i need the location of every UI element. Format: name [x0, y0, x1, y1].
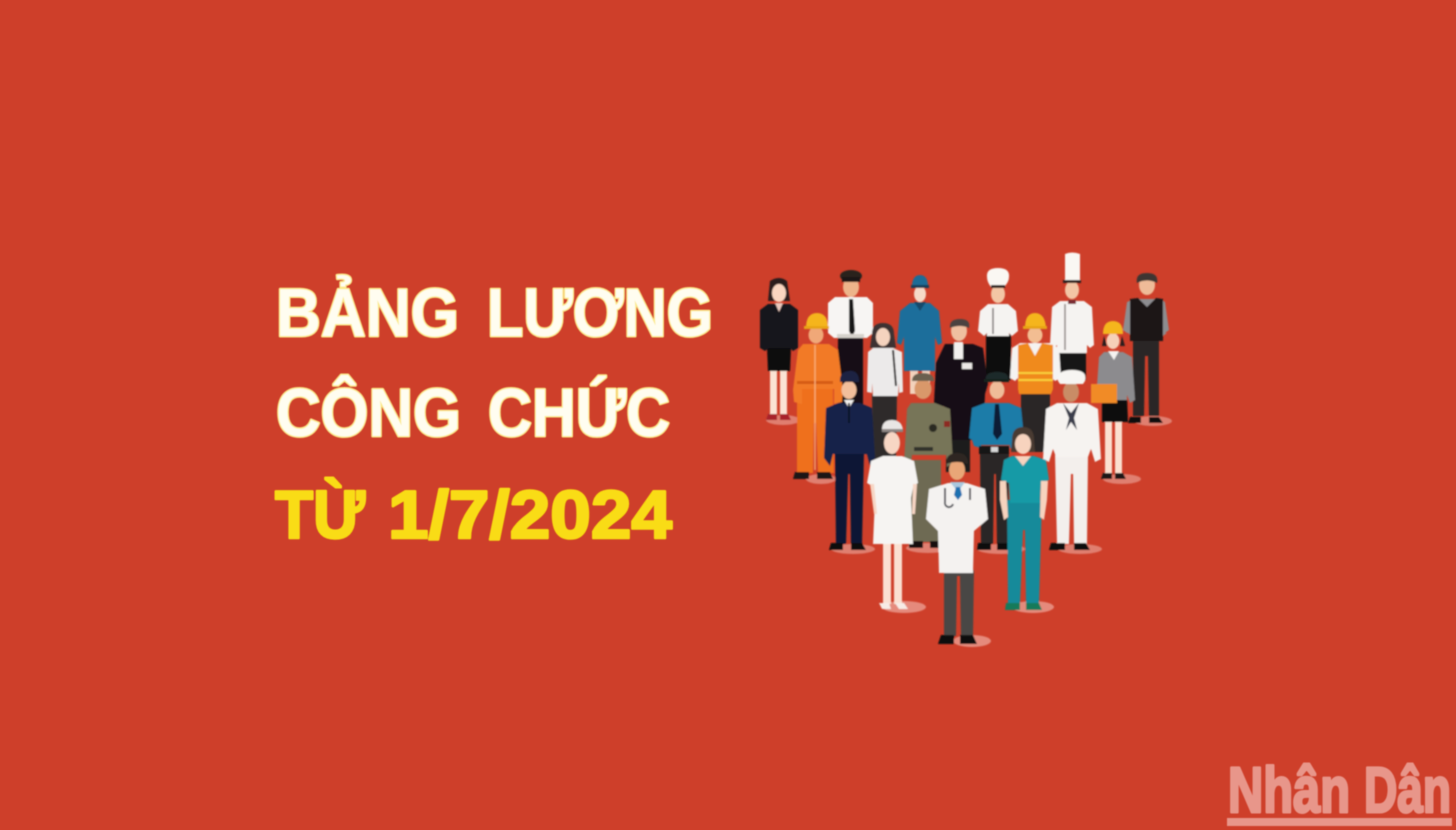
figure: judge in robe	[934, 319, 988, 472]
figure: police officer	[969, 372, 1025, 554]
figure: worker in safety vest	[1010, 313, 1061, 452]
figure: navy officer	[824, 371, 875, 554]
figure: woman in white shirt	[867, 323, 903, 460]
figure: flight attendant	[897, 275, 942, 394]
title line: TỪ 1/7/2024: TỪ	[275, 477, 366, 553]
logo text: Nhân	[1228, 754, 1350, 826]
group of workers illustration	[760, 252, 1172, 647]
figure: nurse in teal scrubs	[1000, 427, 1054, 613]
logo underline	[1227, 818, 1452, 826]
title line: CÔNG CHỨC: CÔNG	[276, 374, 461, 451]
title line: TỪ 1/7/2024: 1/7/2024	[388, 477, 672, 553]
figure: pilot	[828, 270, 873, 406]
figure: woman in black suit	[760, 278, 800, 425]
title line: CÔNG CHỨC: CHỨC	[488, 375, 670, 451]
title	[275, 274, 713, 553]
figure: doctor	[926, 453, 991, 647]
title line: BẢNG LƯƠNG: LƯƠNG	[487, 275, 713, 351]
figure: chef with short hat	[978, 268, 1018, 380]
watermark: Nhân Dân logo	[1227, 754, 1452, 826]
title line: BẢNG LƯƠNG: BẢNG	[276, 274, 459, 351]
figure: woman in grey jacket with folder	[1091, 321, 1141, 484]
title line: CÔNG CHỨC	[276, 374, 670, 451]
figure: nurse	[867, 420, 926, 613]
figure: soldier	[904, 373, 953, 553]
title line: TỪ 1/7/2024	[275, 477, 672, 553]
title line: BẢNG LƯƠNG	[276, 274, 713, 351]
figure: worker in orange jumpsuit	[793, 313, 843, 484]
figure: chef with tall hat	[1050, 252, 1094, 380]
figure: sailor	[1043, 370, 1102, 554]
figure: man in vest	[1123, 273, 1172, 426]
